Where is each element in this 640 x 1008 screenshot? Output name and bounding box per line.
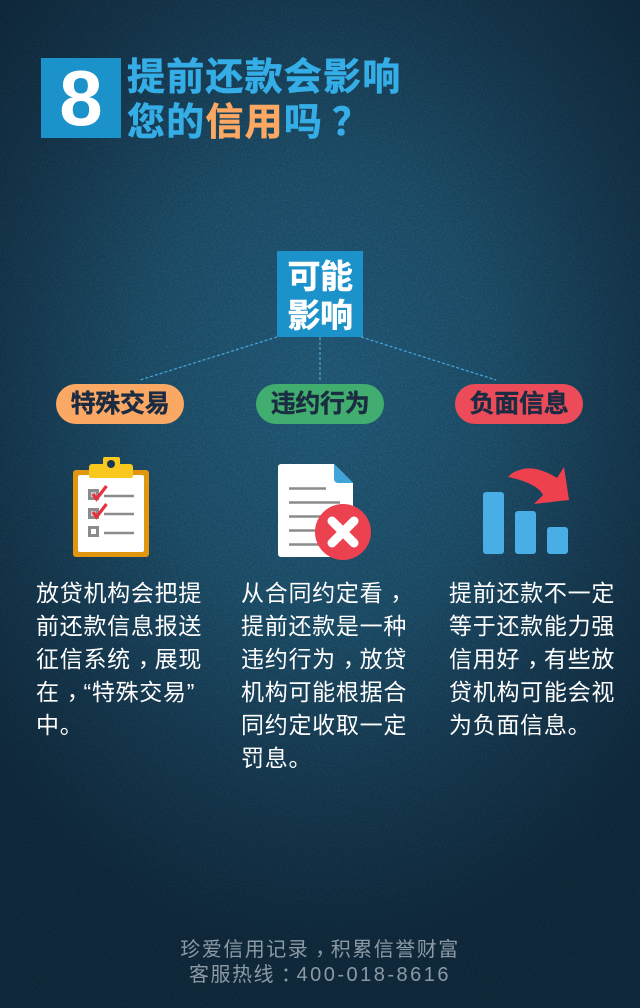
footer [180, 938, 460, 986]
title: ？ [332, 102, 371, 144]
pill: negative information [455, 384, 583, 424]
pill: special transaction: 特殊交易 [71, 390, 169, 418]
text: negative information [449, 580, 615, 738]
text: special transaction: 中。 [36, 712, 83, 738]
text: default behaviour: 机构可能根据合 [241, 679, 407, 705]
text: special transaction: 在 ，“特殊交易” [36, 678, 195, 705]
text: negative information: 信用好 ，有些放 [449, 645, 615, 672]
text: special transaction: 征信系统 ，展现 [36, 645, 202, 672]
number badge [41, 58, 121, 138]
title: 您的信用吗 [127, 102, 323, 144]
text: negative information: 为负面信息。 [449, 712, 591, 738]
icon: clipboard checklist [73, 457, 149, 557]
text: default behaviour [241, 579, 414, 771]
icon: document with cross [278, 464, 371, 560]
center box: possible impact: 可能 [288, 258, 352, 295]
footer: 客服热线 ：400-018-8616 [189, 964, 451, 986]
text: default behaviour: 同约定收取一定 [241, 712, 407, 738]
pill: default behaviour: 违约行为 [271, 390, 369, 418]
pill: special transaction [56, 384, 184, 424]
pill: negative information: 负面信息 [470, 390, 568, 418]
text: negative information: 贷机构可能会视 [449, 679, 615, 705]
text: default behaviour: 违约行为 ，放贷 [241, 645, 407, 672]
text: special transaction [36, 580, 202, 738]
dashed connector lines [140, 336, 496, 381]
text: negative information: 等于还款能力强 [449, 613, 615, 639]
title [127, 56, 401, 144]
text: default behaviour: 罚息。 [241, 745, 312, 771]
text: special transaction: 放贷机构会把提 [36, 580, 202, 606]
text: default behaviour: 从合同约定看 ， [241, 579, 414, 606]
center box: possible impact [277, 251, 363, 337]
icon: falling bar chart [483, 467, 569, 554]
text: negative information: 提前还款不一定 [449, 580, 615, 606]
footer: 珍爱信用记录 ，积累信誉财富 [180, 938, 460, 961]
center box: possible impact: 影响 [288, 297, 352, 334]
text: special transaction: 前还款信息报送 [36, 613, 202, 639]
title: 提前还款会影响 [127, 57, 401, 99]
number badge: 8 [59, 54, 103, 142]
text: default behaviour: 提前还款是一种 [241, 613, 407, 639]
pill: default behaviour [256, 384, 384, 424]
